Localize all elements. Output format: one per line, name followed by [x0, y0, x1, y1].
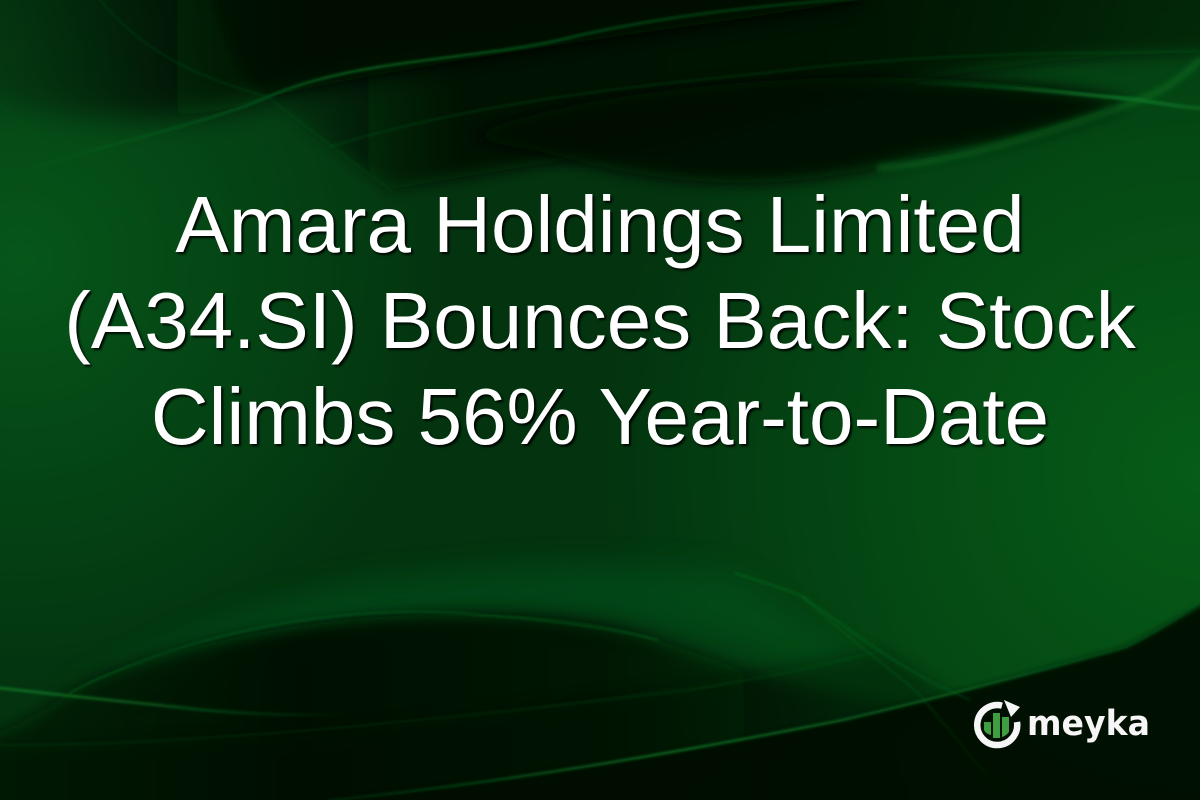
wordmark: meyka: [1027, 704, 1150, 744]
logo: meyka: [974, 700, 1150, 748]
darkest bottom: [0, 650, 960, 800]
dark blob under second curve: [470, 77, 1130, 183]
title: [64, 180, 1138, 461]
title: Amara Holdings Limited: [175, 180, 1025, 269]
dark hump and lower band: [0, 614, 1200, 800]
top band between curves: [268, 0, 1200, 190]
title: Climbs 56% Year-to-Date: [151, 372, 1049, 461]
hump band: [60, 566, 918, 700]
title: (A34.SI) Bounces Back: Stock: [64, 276, 1136, 365]
top dark corner above first curve: [0, 0, 880, 118]
icon: circular arrow with bars: [977, 700, 1020, 745]
